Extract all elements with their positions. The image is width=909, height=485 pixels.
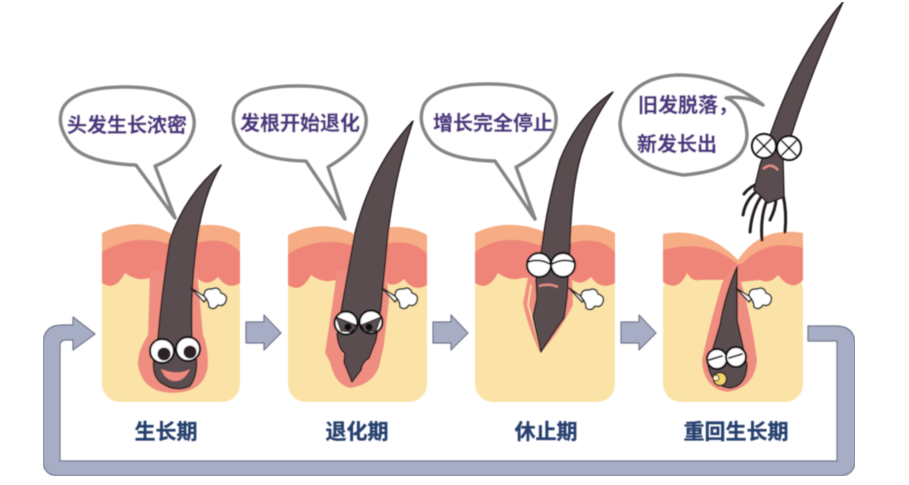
puff of air	[382, 288, 417, 309]
skin block	[288, 226, 427, 402]
loop arrow returning to first stage	[43, 317, 855, 476]
follicle	[523, 272, 573, 353]
bubble text: 发根开始退化	[240, 112, 360, 135]
arrow: stage 3 to 4	[621, 315, 656, 350]
skin block	[475, 225, 615, 402]
panel: growth stage	[102, 165, 240, 402]
hair roots	[743, 183, 786, 240]
skin block	[102, 224, 240, 402]
puff of air	[191, 288, 226, 309]
panel: regression stage	[288, 121, 427, 402]
puff of air	[736, 288, 771, 309]
speech bubble 3	[421, 84, 556, 219]
label: regrowth stage: 重回生长期	[684, 421, 788, 444]
follicle	[702, 262, 757, 392]
hair shaft	[754, 2, 843, 203]
hair with sleeping face	[527, 92, 613, 352]
label: resting stage: 休止期	[514, 421, 578, 444]
new hair with pacifier	[707, 267, 747, 388]
follicle cracks	[528, 285, 540, 348]
panel: resting stage	[475, 92, 615, 402]
dizzy eye left	[752, 134, 776, 158]
dizzy eye right	[777, 136, 801, 160]
falling old hair	[743, 2, 843, 240]
arrow: stage 1 to 2	[246, 315, 281, 350]
speech bubble 2	[233, 86, 366, 219]
skin block	[663, 232, 803, 402]
hair with smiling face	[150, 165, 221, 389]
bubble text line 2: 新发长出	[637, 133, 717, 156]
label: regression stage: 退化期	[326, 421, 388, 444]
frown	[763, 166, 778, 170]
bubble text: 头发生长浓密	[67, 113, 187, 137]
speech bubble 1	[60, 87, 194, 218]
label: growth stage: 生长期	[134, 421, 198, 444]
bubble text line 1: 旧发脱落，	[638, 94, 738, 117]
bubble text: 增长完全停止	[433, 111, 553, 135]
speech bubble 4	[620, 75, 763, 175]
follicle	[325, 270, 389, 388]
puff of air	[569, 288, 603, 310]
panel: regrowth stage	[663, 232, 803, 402]
arrow: stage 2 to 3	[433, 315, 468, 350]
follicle	[138, 270, 208, 393]
hair with tired face	[334, 121, 413, 382]
